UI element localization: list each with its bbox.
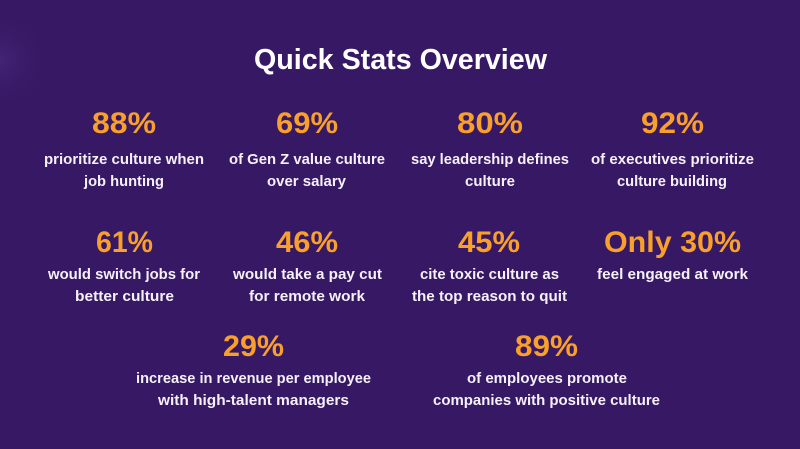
stat: 69%: of Gen Z value culture: [229, 151, 385, 168]
stat: 46%: would take a pay cut: [232, 266, 382, 283]
stat: 80%: culture: [465, 173, 515, 190]
stat: 80%: say leadership defines: [411, 151, 569, 168]
stat: 88%: job hunting: [83, 173, 164, 190]
stat: 80%: 80%: [457, 107, 523, 140]
stat: 92%: 92%: [641, 107, 704, 140]
stat: 89%: 89%: [515, 330, 578, 363]
stat: 29%: with high-talent managers: [157, 392, 349, 409]
stat: 45%: 45%: [458, 226, 520, 259]
stat: 92%: of executives prioritize: [591, 151, 754, 168]
stat: 61%: [47, 226, 200, 305]
stat: Only 30%: Only 30%: [604, 226, 741, 259]
stat: 45%: cite toxic culture as: [420, 266, 559, 283]
stat: 46%: [232, 226, 382, 305]
stat: 89%: of employees promote: [467, 370, 627, 387]
title: Quick Stats Overview: [254, 44, 548, 76]
stat: 80%: [411, 107, 569, 190]
stat: 61%: would switch jobs for: [47, 266, 200, 283]
stat: 88%: [44, 107, 204, 190]
stat: 46%: 46%: [276, 226, 338, 259]
stat: 88%: prioritize culture when: [44, 151, 204, 168]
stat: 29%: [136, 330, 371, 409]
stat: 88%: 88%: [92, 107, 156, 140]
stat: 61%: 61%: [96, 226, 153, 259]
stat: 89%: [433, 330, 660, 409]
stat: 45%: the top reason to quit: [412, 288, 567, 305]
stat: 46%: for remote work: [249, 288, 366, 305]
stat: 92%: [591, 107, 754, 190]
stat: Only 30%: [597, 226, 749, 283]
stat: 69%: 69%: [276, 107, 338, 140]
stat: 61%: better culture: [75, 288, 174, 305]
stat: 92%: culture building: [617, 173, 727, 190]
stat: 89%: companies with positive culture: [433, 392, 660, 409]
stat: 69%: over salary: [267, 173, 347, 190]
stat: 69%: [229, 107, 385, 190]
stat: 29%: increase in revenue per employee: [136, 370, 371, 387]
stat: 29%: 29%: [223, 330, 284, 363]
stat: Only 30%: feel engaged at work: [597, 266, 749, 283]
stat: 45%: [412, 226, 567, 305]
